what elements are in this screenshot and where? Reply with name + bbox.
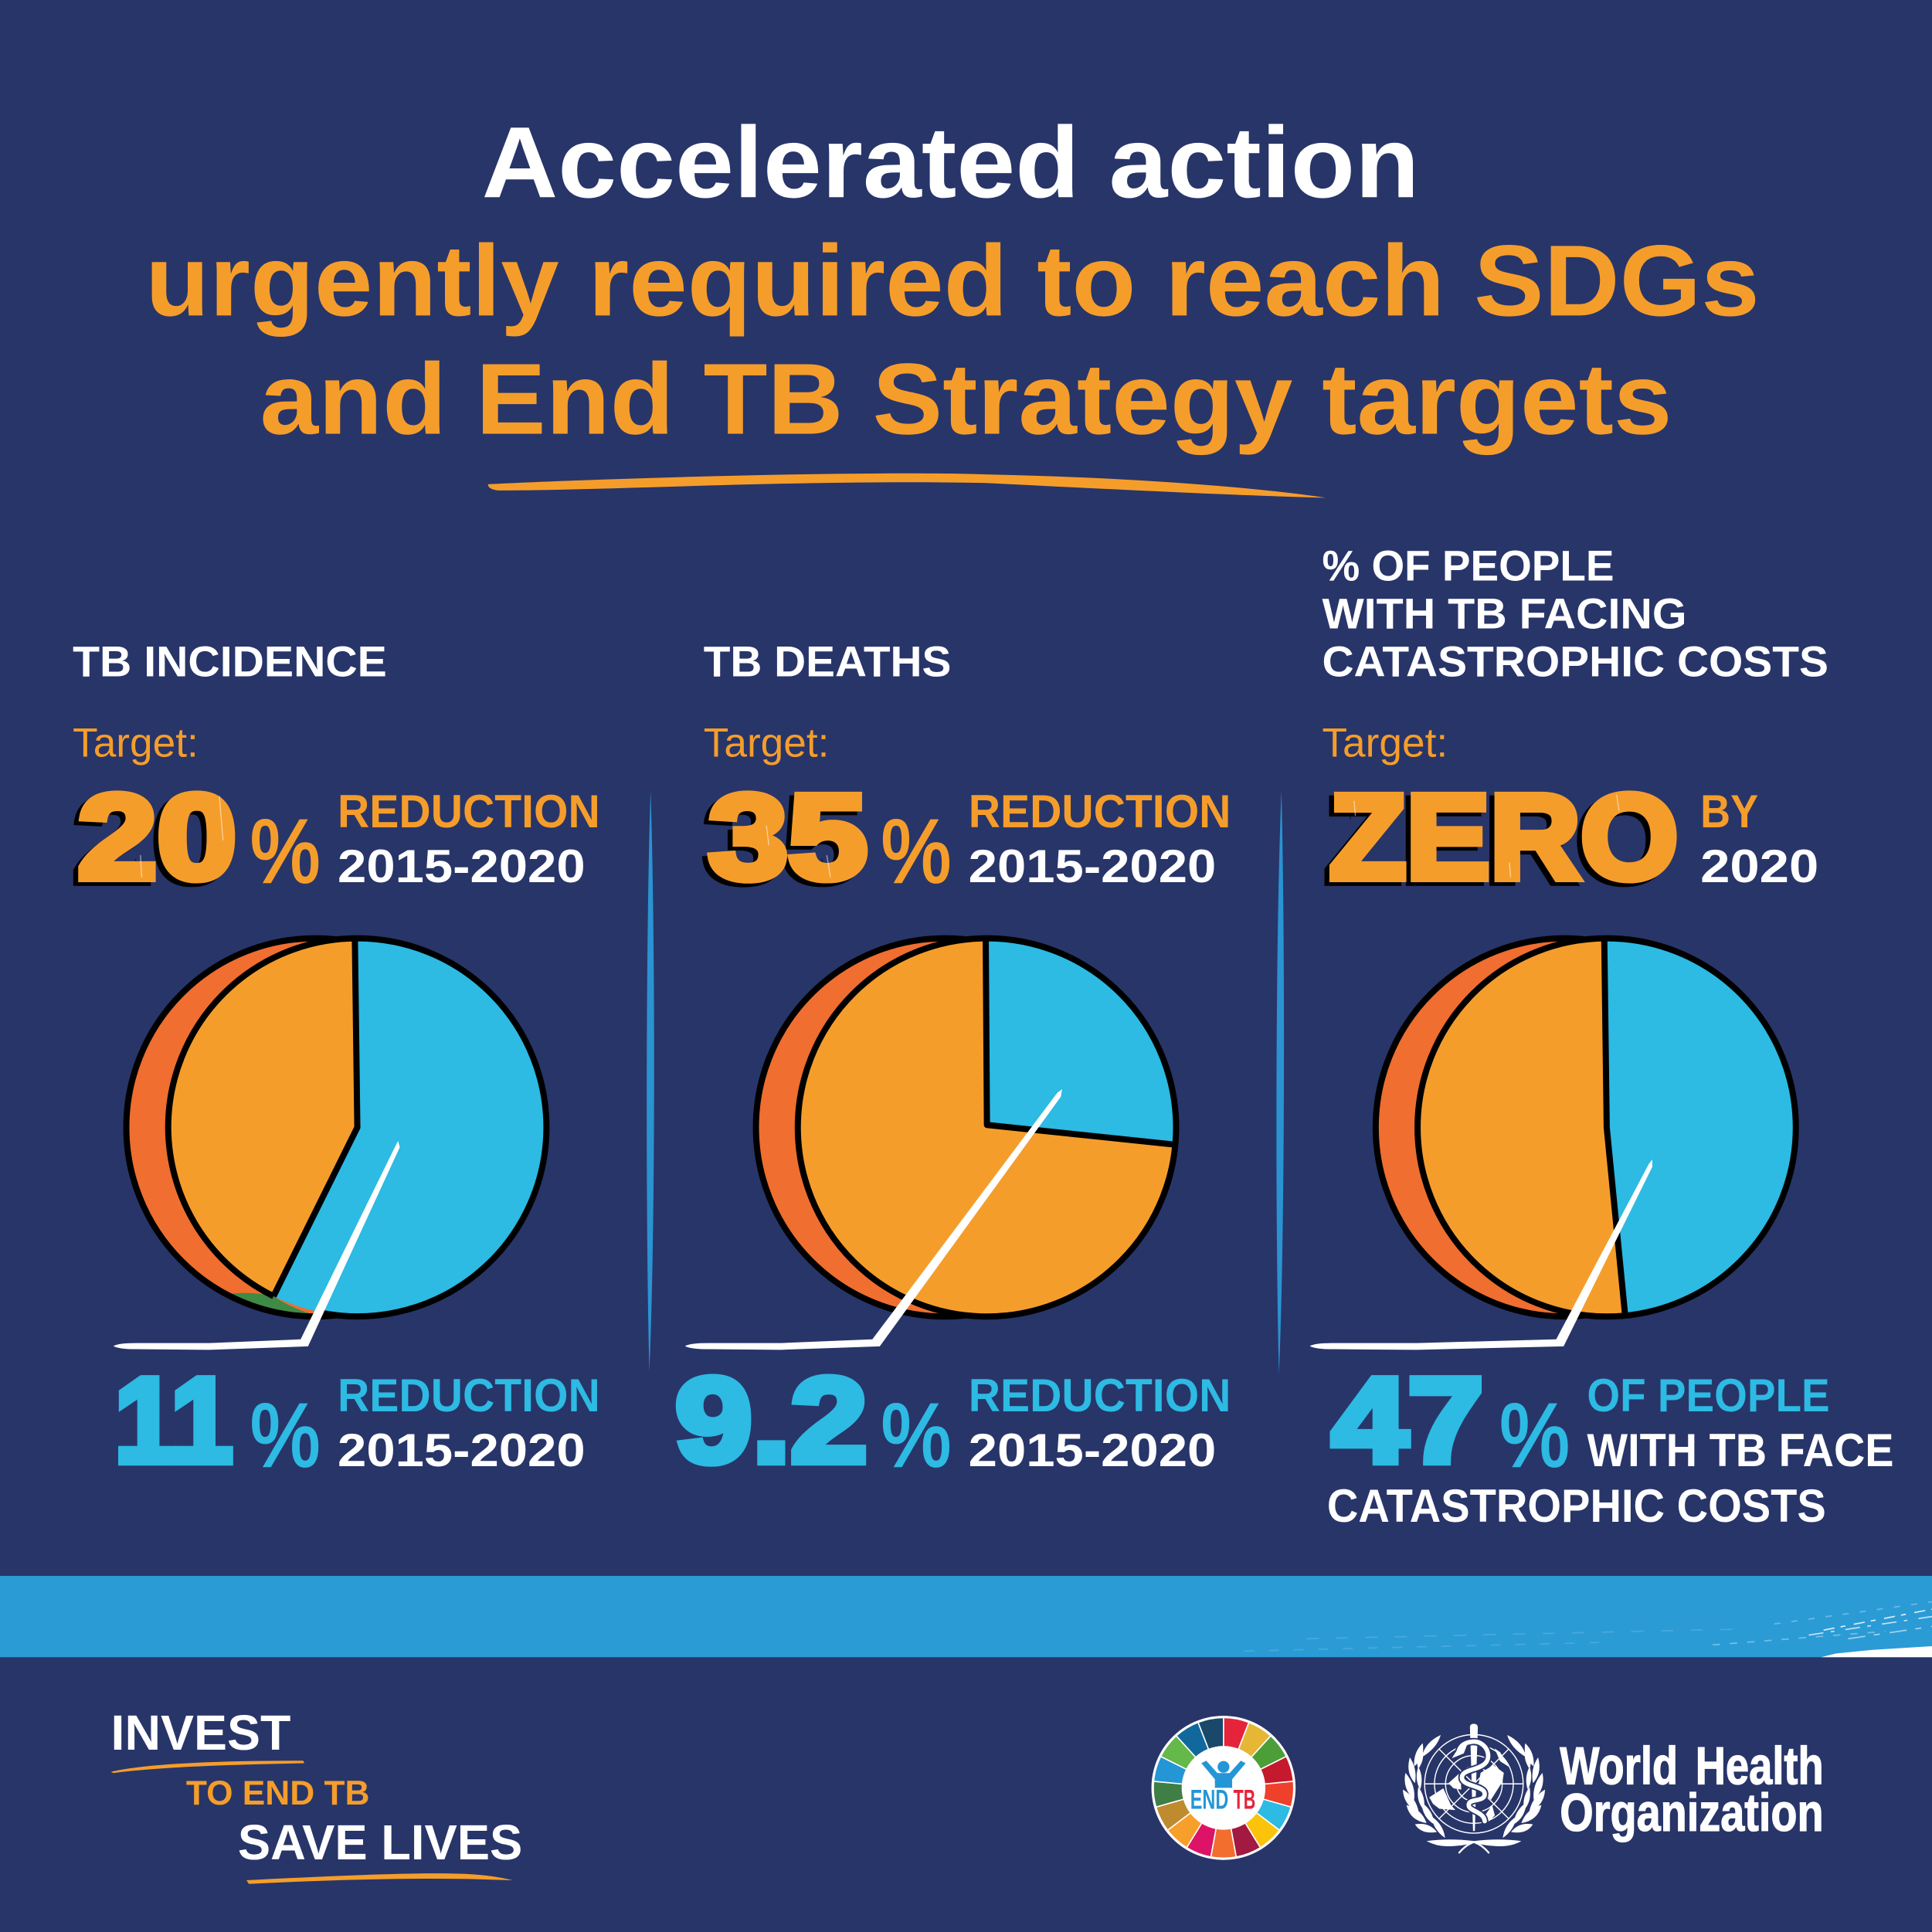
campaign slogan: INVEST: [111, 1705, 290, 1761]
target label: Target:: [704, 720, 829, 766]
result description: 2015-2020: [969, 1424, 1216, 1476]
blue brush band: [0, 1576, 1932, 1657]
End TB logo: END: [1190, 1784, 1228, 1815]
result value 11 percent: 11: [114, 1353, 233, 1488]
pointer line: [114, 1141, 400, 1350]
pie chart: TB deaths: [756, 938, 1177, 1316]
End TB logo: [1152, 1716, 1295, 1860]
ribbon: [1427, 1839, 1521, 1852]
pie chart: catastrophic costs: [1376, 938, 1796, 1316]
target label: Target:: [73, 720, 199, 766]
target description: 2015-2020: [338, 840, 586, 892]
pie chart: TB incidence: [126, 938, 546, 1317]
target description: REDUCTION: [969, 785, 1231, 837]
target value 20 percent: 20: [77, 769, 236, 905]
WHO wordmark: World Health: [1560, 1737, 1824, 1796]
End TB logo: TB: [1234, 1784, 1255, 1815]
globe: [1424, 1734, 1523, 1833]
target label: Target:: [1322, 720, 1448, 766]
WHO wordmark: [1560, 1737, 1824, 1842]
target description: [1700, 785, 1818, 892]
WHO wordmark: Organization: [1560, 1783, 1824, 1842]
right laurel: [1502, 1735, 1545, 1838]
panel: TB incidence: [73, 637, 600, 1488]
result description: [969, 1369, 1231, 1476]
result description: OF PEOPLE: [1587, 1369, 1830, 1421]
title underline stroke: [488, 474, 1326, 497]
result percent sign: %: [250, 1385, 321, 1486]
campaign slogan: TO END TB: [186, 1774, 370, 1812]
target description: [969, 785, 1231, 892]
title: urgently required to reach SDGs: [145, 224, 1760, 337]
title: [145, 106, 1760, 455]
result description: [338, 1369, 600, 1476]
heading: catastrophic costs: % OF PEOPLE: [1322, 541, 1614, 589]
percent sign: %: [881, 801, 951, 901]
result description: CATASTROPHIC COSTS: [1327, 1479, 1826, 1532]
heading: catastrophic costs: [1322, 541, 1828, 686]
result value 9.2 percent: 9.2: [675, 1353, 868, 1488]
left laurel: [1403, 1735, 1445, 1838]
result description: REDUCTION: [338, 1369, 600, 1421]
panel: TB deaths: [675, 637, 1231, 1488]
target description: REDUCTION: [338, 785, 600, 837]
pointer line: [1310, 1160, 1652, 1350]
result value 47 percent: 47: [1332, 1353, 1483, 1488]
staff: [1470, 1723, 1478, 1831]
continents: [1429, 1748, 1510, 1822]
heading: TB deaths: TB DEATHS: [704, 637, 951, 686]
target description: 2015-2020: [969, 840, 1216, 892]
result percent sign: %: [1499, 1385, 1570, 1486]
pointer line: [685, 1089, 1062, 1350]
target value ZERO: ZERO: [1329, 769, 1678, 905]
result description: REDUCTION: [969, 1369, 1231, 1421]
target description: [338, 785, 600, 892]
heading: catastrophic costs: WITH TB FACING: [1322, 589, 1687, 637]
serpent: [1452, 1742, 1488, 1821]
result description: WITH TB FACE: [1587, 1424, 1894, 1476]
title: Accelerated action: [482, 106, 1419, 219]
title: and End TB Strategy targets: [260, 342, 1672, 455]
WHO emblem: [1403, 1723, 1545, 1852]
heading: TB incidence: TB INCIDENCE: [73, 637, 387, 686]
target description: 2020: [1700, 840, 1818, 892]
heading: catastrophic costs: CATASTROPHIC COSTS: [1322, 637, 1828, 686]
campaign slogan: SAVE LIVES: [238, 1815, 522, 1870]
percent sign: %: [250, 801, 321, 901]
panel: catastrophic costs: [1310, 541, 1894, 1532]
campaign slogan: [111, 1705, 522, 1884]
target value 35 percent: 35: [708, 769, 868, 905]
target description: BY: [1700, 785, 1758, 837]
result description: [1327, 1369, 1894, 1532]
result description: 2015-2020: [338, 1424, 586, 1476]
result percent sign: %: [881, 1385, 951, 1486]
